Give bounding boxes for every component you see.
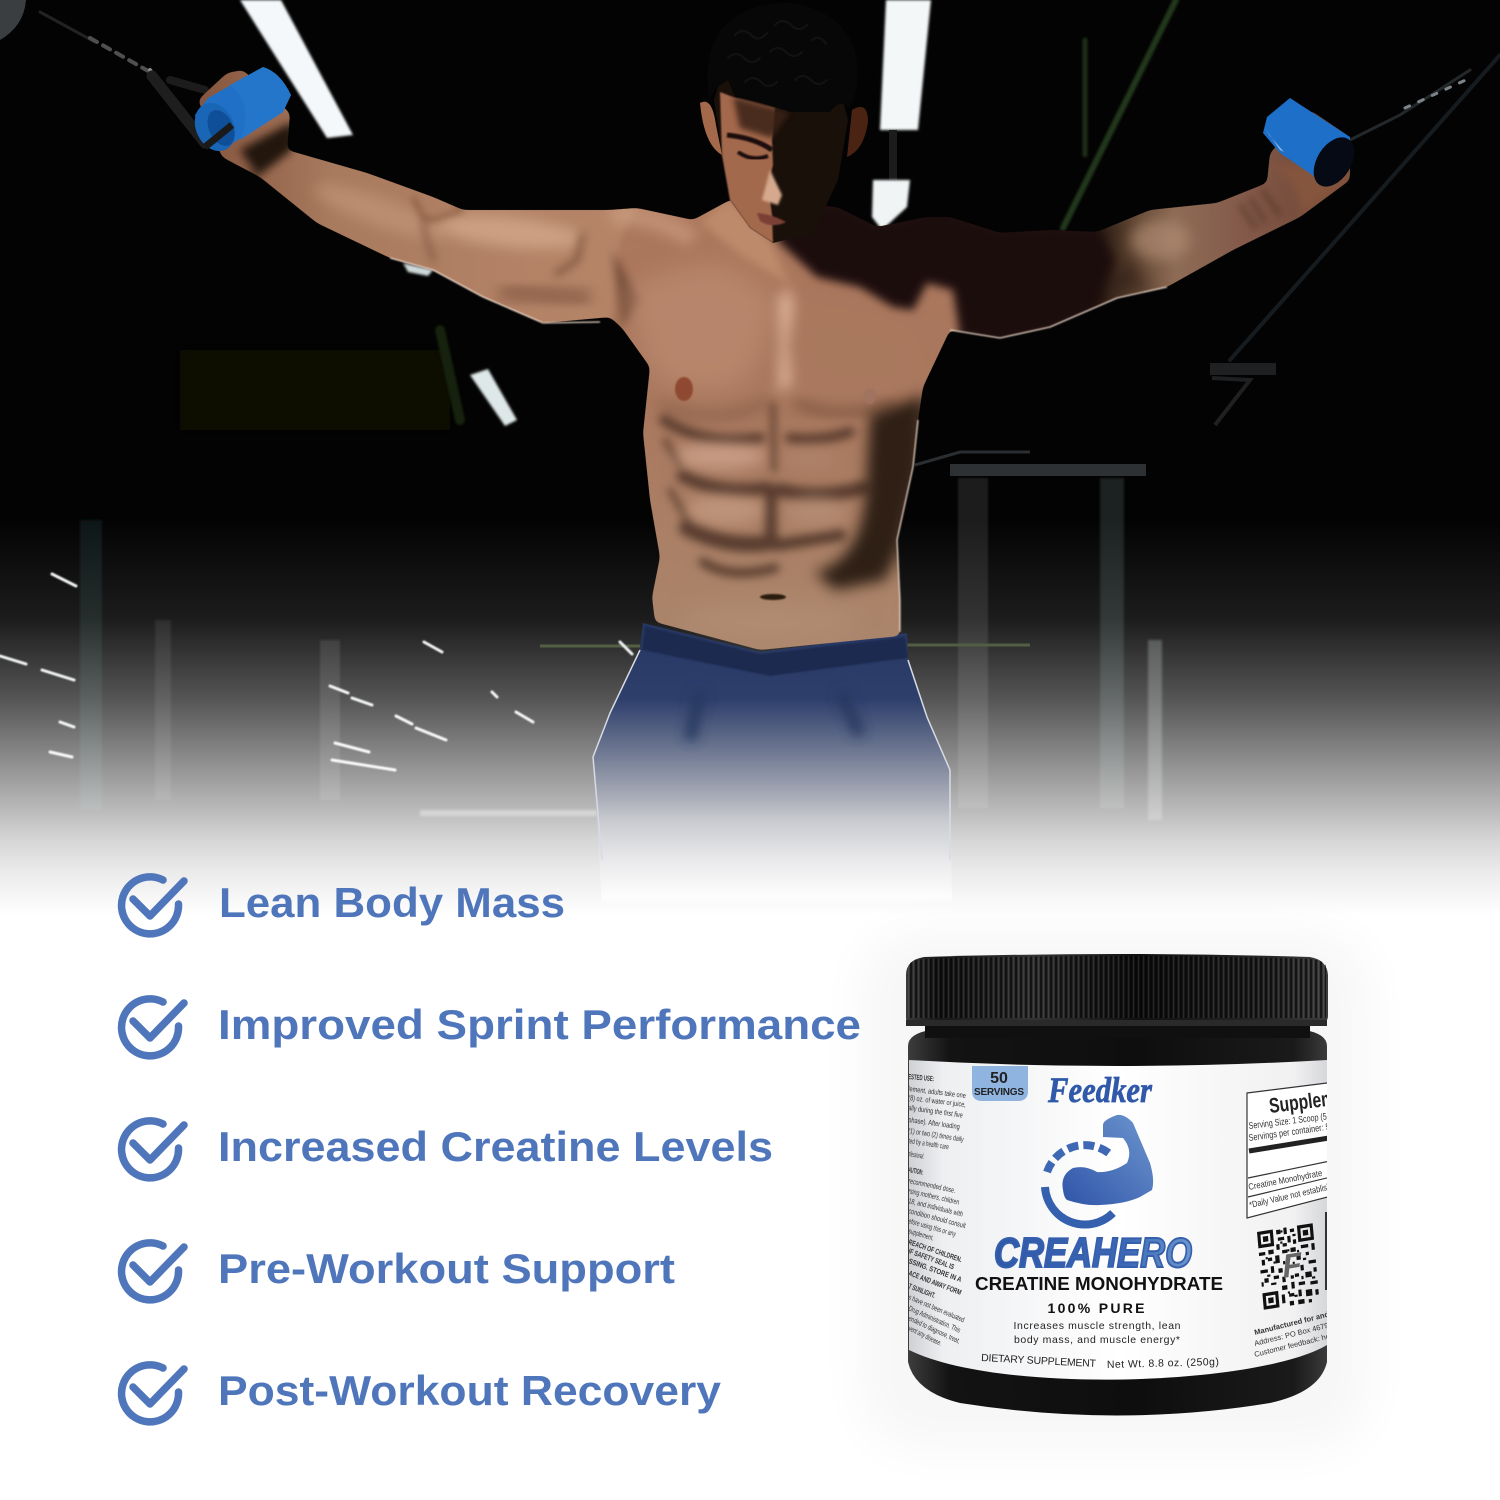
directions text: phase). After loading (908, 1115, 960, 1131)
benefit: pre-workout: Pre-Workout Support (218, 1245, 675, 1292)
benefit: sprint performance (122, 999, 861, 1056)
directions text: recommended dose. (908, 1176, 956, 1195)
abdominal shading (664, 405, 862, 573)
benefit: lean body mass (122, 877, 565, 934)
jar shadow (860, 930, 1370, 1450)
benefit: pre-workout (122, 1243, 675, 1300)
directions text: ted by a health care (908, 1136, 950, 1151)
directions text: ACE AND AWAY FORM (907, 1268, 963, 1297)
benefit: post-workout (122, 1365, 722, 1422)
white fade (0, 480, 1500, 926)
bottom label text: DIETARY SUPPLEMENT (981, 1352, 1097, 1370)
directions text: ESTED USE: (908, 1072, 935, 1083)
chest (625, 262, 775, 390)
man (187, 3, 1363, 905)
benefit: sprint performance: Improved Sprint Performance (218, 1001, 861, 1048)
product name: CREAHERO (994, 1229, 1192, 1276)
manufacturer text (1254, 1311, 1327, 1356)
side rule (1325, 1212, 1327, 1290)
QR code (1257, 1223, 1319, 1310)
directions text: ofessional. (908, 1149, 925, 1161)
directions text: SSING. STORE IN A (907, 1256, 964, 1284)
directions text: s have not been evaluated (907, 1293, 966, 1324)
benefit: post-workout: Post-Workout Recovery (218, 1367, 722, 1414)
directions text: (8) oz. of water or juice, (908, 1093, 966, 1109)
servings badge: 50 (990, 1070, 1008, 1087)
claim: Increases muscle strength, lean (1014, 1320, 1181, 1332)
manufacturer text: Customer feedback: help@feedker.com (1253, 1318, 1383, 1359)
directions text: lement, adults take one (908, 1084, 966, 1100)
background lights (0, 574, 632, 770)
benefit: lean body mass: Lean Body Mass (219, 879, 565, 926)
purity: 100% PURE (1048, 1300, 1144, 1316)
directions text: IF SAFETY SEAL IS (907, 1246, 956, 1271)
cable pulley (0, 0, 26, 40)
cables (40, 12, 1500, 360)
claim: body mass, and muscle energy* (1014, 1334, 1180, 1346)
claim (1014, 1322, 1180, 1345)
benefit: creatine levels (122, 1121, 773, 1178)
right arm (1092, 112, 1350, 308)
directions text: T SUNLIGHT. (907, 1281, 937, 1300)
directions text: rsing mothers, children (908, 1186, 960, 1207)
directions text: REACH OF CHILDREN. (907, 1237, 963, 1264)
hair (707, 3, 858, 112)
directions text: (1) or two (2) times daily (908, 1126, 965, 1144)
directions text: AUTION: (908, 1165, 924, 1177)
left blue grip (187, 67, 291, 158)
jar label (909, 1060, 1327, 1380)
left arm shading (198, 70, 637, 323)
right blue grip (1263, 98, 1363, 194)
green pipes (440, 0, 1176, 420)
directions text: 18, and individuals with (908, 1196, 964, 1218)
muscle logo (1045, 1115, 1153, 1225)
jar neck (925, 1022, 1310, 1038)
benefit list (122, 877, 861, 1422)
supplement facts panel (1246, 1082, 1327, 1219)
supplement facts panel: *Daily Value not established (1248, 1180, 1340, 1210)
head (700, 3, 868, 243)
directions text: ally during the first five (908, 1103, 963, 1120)
directions text (907, 1072, 967, 1348)
gym machinery (80, 363, 1276, 820)
torso and arms (198, 70, 1350, 650)
QR code: F (1281, 1245, 1304, 1285)
nipples and navel (675, 377, 876, 600)
benefit: creatine levels: Increased Creatine Levels (218, 1123, 773, 1170)
supplement facts panel: Creatine Monohydrate (1247, 1168, 1323, 1192)
directions text: efore using this or any (907, 1216, 957, 1238)
rim lights (390, 258, 1167, 632)
directions text: supplement. (907, 1226, 935, 1243)
supplement facts panel: Supplement Facts (1268, 1079, 1405, 1118)
product jar (906, 954, 1328, 1416)
neck shade (703, 200, 786, 280)
directions text: condition should consult (907, 1206, 967, 1230)
manufacturer text: Manufactured for and distributed by (1253, 1297, 1381, 1337)
directions text: Drug Administration. This (907, 1304, 962, 1335)
right dark shoulder (773, 206, 1116, 336)
page lower background (0, 915, 1500, 1500)
supplement facts panel: Servings per container: 50 (1248, 1121, 1335, 1144)
ears (700, 102, 722, 155)
jar lid (906, 954, 1328, 1026)
ceiling light tubes (240, 0, 931, 426)
servings badge: SERVINGS (974, 1087, 1024, 1098)
jar body (908, 1030, 1327, 1416)
shorts (593, 623, 952, 905)
jar label: Net Wt. 8.8 oz. (250g) (1107, 1356, 1219, 1371)
directions text: vent any disease. (907, 1324, 943, 1348)
directions text: ended to diagnose, treat, (907, 1314, 962, 1345)
face (714, 80, 848, 243)
photo background (0, 0, 1500, 925)
supplement facts panel: Serving Size: 1 Scoop (5g) (1248, 1111, 1334, 1132)
manufacturer text: Address: PO Box 4679, Road Town (1253, 1311, 1370, 1348)
product subtitle: CREATINE MONOHYDRATE (975, 1274, 1223, 1294)
servings badge (972, 1066, 1028, 1101)
brand: Feedker: Feedker (1047, 1070, 1153, 1110)
